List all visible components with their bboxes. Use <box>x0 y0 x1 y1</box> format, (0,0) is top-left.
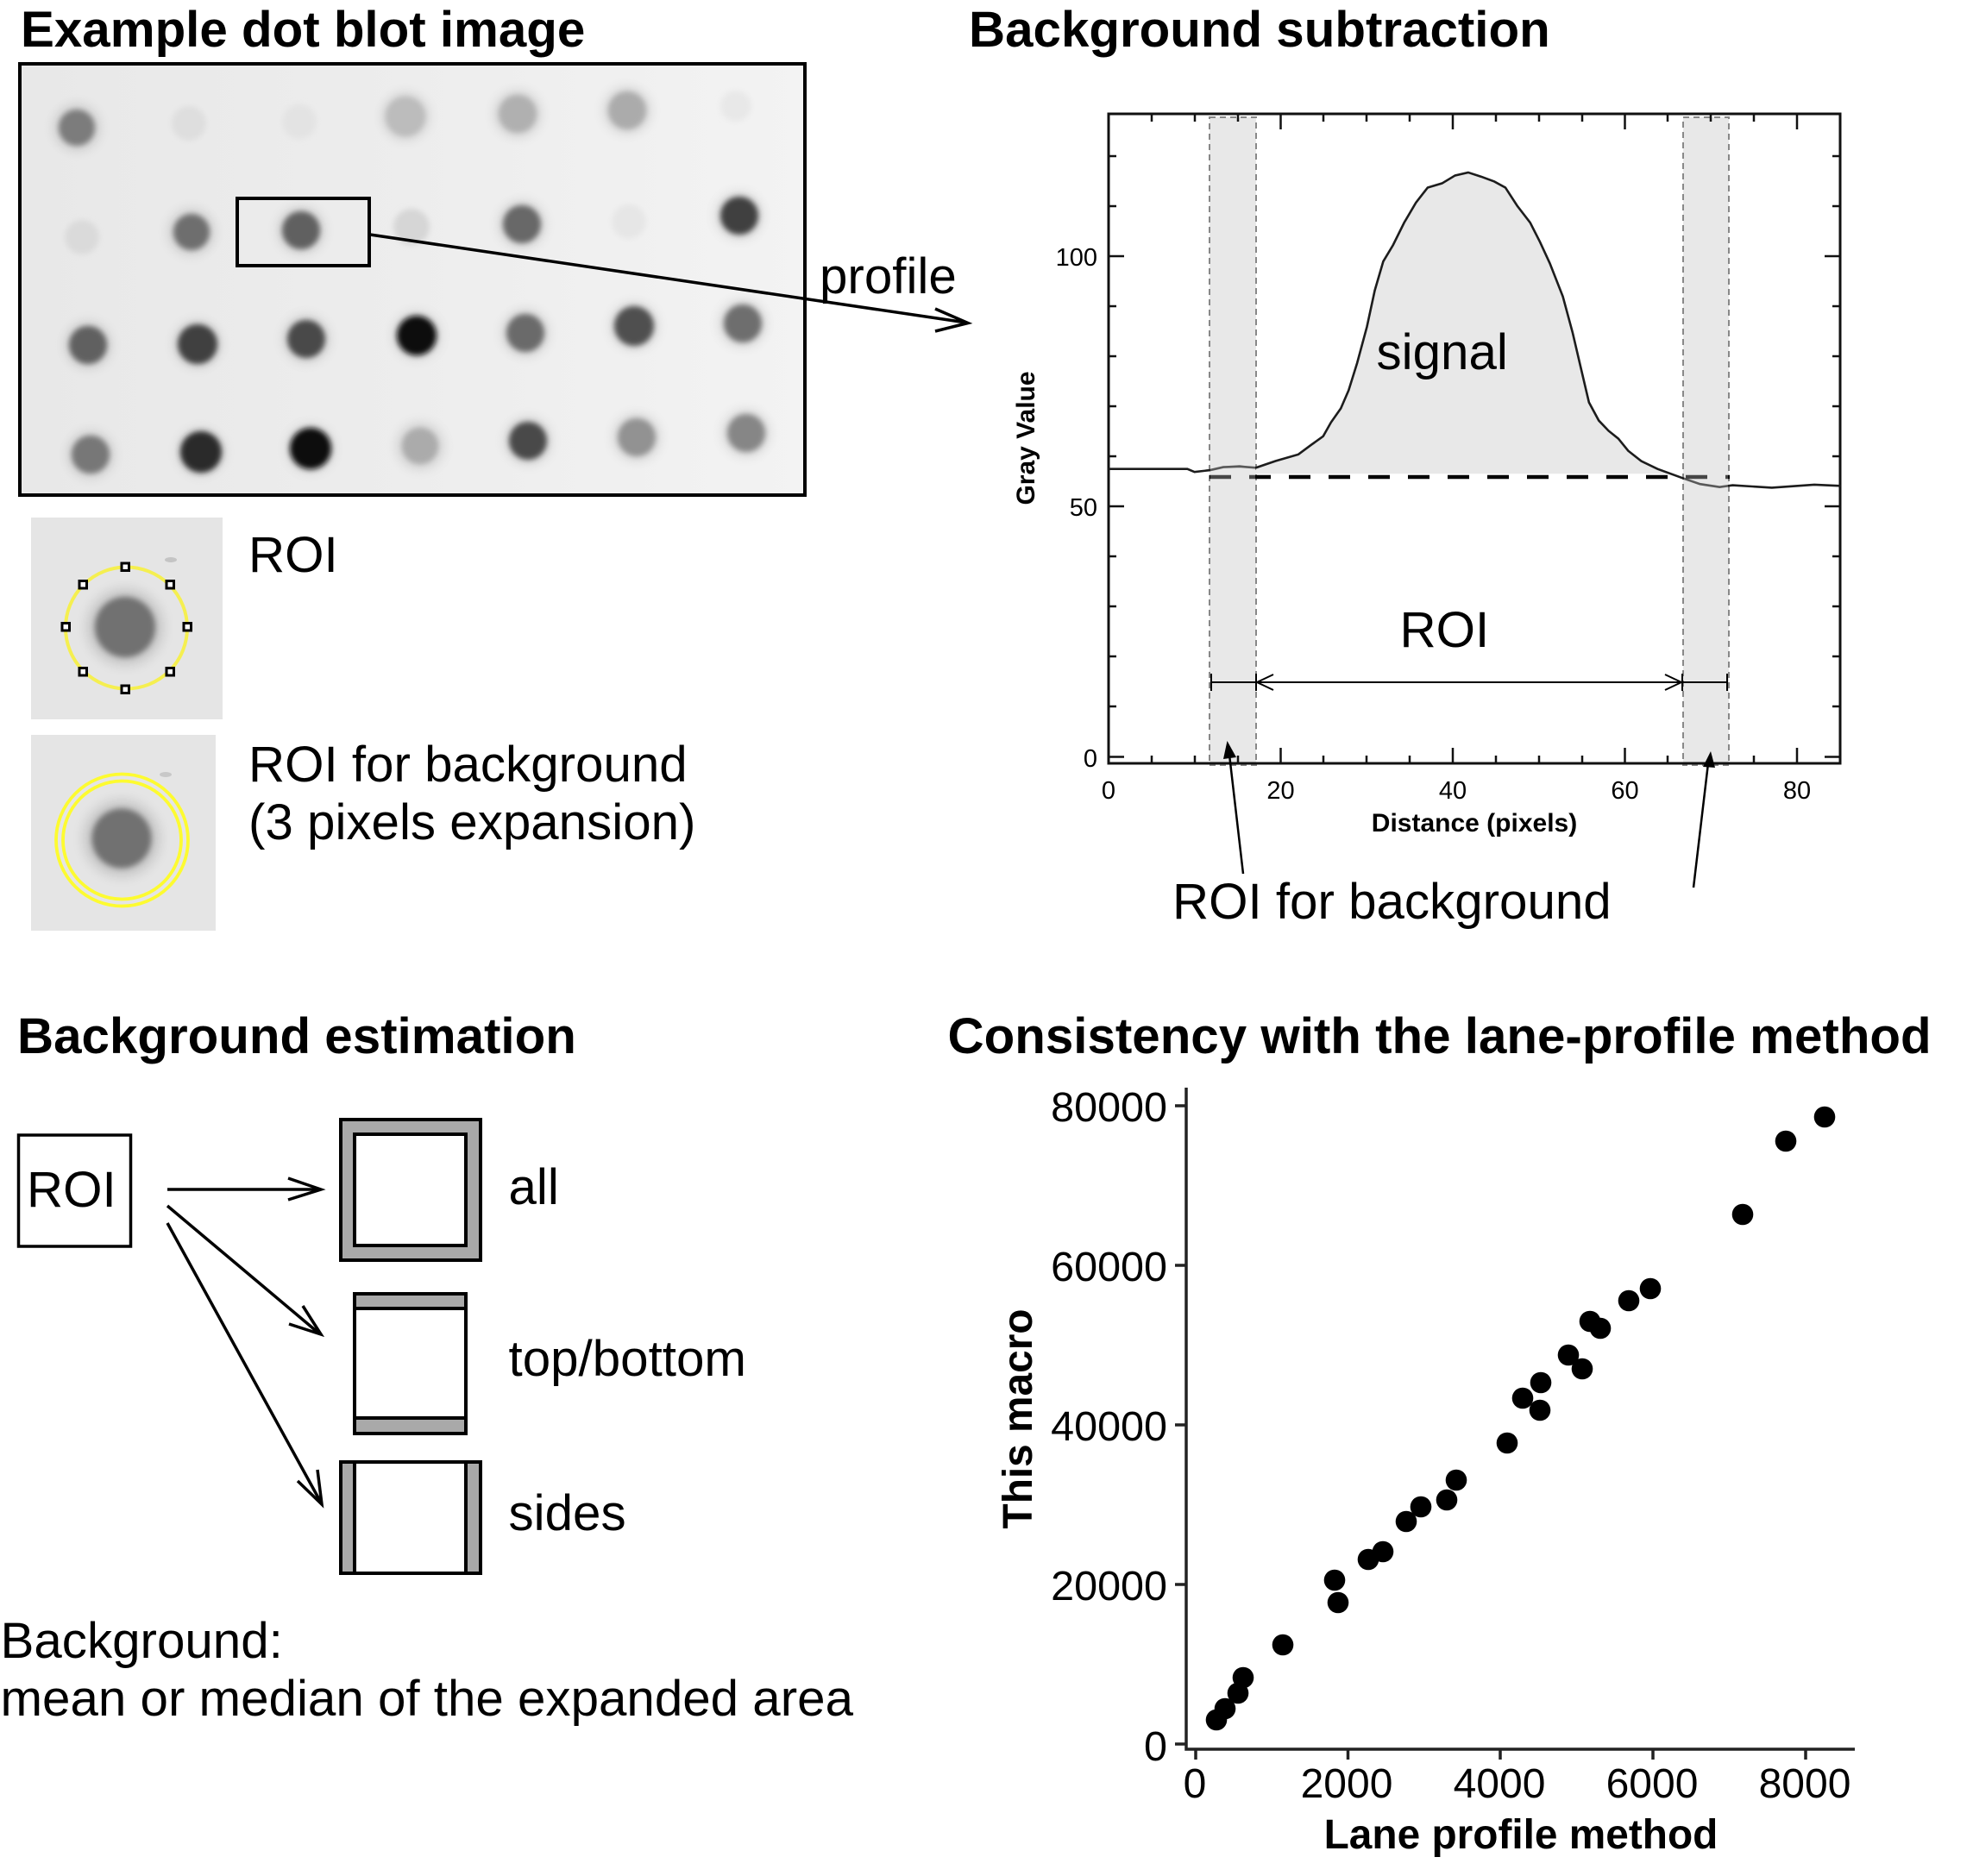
dashed background level <box>1210 475 1730 479</box>
arrow: to sides <box>167 1223 322 1504</box>
selection box around dot <box>237 198 369 266</box>
profile y axis labels <box>1056 244 1097 773</box>
profile y axis labels: 50 <box>1070 494 1097 522</box>
axis title: lane profile method: Lane profile method <box>1324 1812 1718 1858</box>
profile y axis labels: 100 <box>1056 244 1097 272</box>
label: all: all <box>509 1159 559 1215</box>
arrow: to all <box>167 1178 321 1200</box>
scatter x axis labels: 8000 <box>1759 1761 1850 1807</box>
label: sides: sides <box>509 1485 626 1541</box>
scatter axes and ticks <box>1175 1088 1855 1760</box>
label: ROI for background: ROI for background <box>1172 874 1612 930</box>
scatter y axis labels: 60000 <box>1051 1244 1167 1290</box>
label: 3 pixels expansion: (3 pixels expansion) <box>248 794 695 850</box>
label: profile: profile <box>820 248 957 304</box>
text: background definition: mean or median of the expanded area <box>0 1671 854 1727</box>
profile x axis labels: 20 <box>1266 777 1295 805</box>
scatter y axis labels: 80000 <box>1051 1084 1167 1131</box>
label: ROI in plot: ROI <box>1399 602 1489 658</box>
title: example dot blot image: Example dot blot image <box>21 2 585 58</box>
arrow: to top/bottom <box>167 1206 321 1334</box>
diagram: sides <box>341 1462 481 1573</box>
thumbnail: ROI for background <box>31 735 216 931</box>
text: background definition <box>0 1613 854 1727</box>
panel: example dot blot image <box>20 2 968 495</box>
scatter x axis labels: 6000 <box>1606 1761 1698 1807</box>
profile chart frame and ticks <box>1109 114 1840 763</box>
diagram: all <box>341 1120 481 1260</box>
profile y axis labels: 0 <box>1084 745 1097 773</box>
ROI box: ROI <box>27 1162 116 1218</box>
thumbnail: ROI <box>31 518 223 719</box>
background ROI band: left <box>1210 117 1256 765</box>
scatter x axis labels <box>1184 1761 1850 1807</box>
scatter y axis labels <box>1051 1084 1167 1770</box>
signal area fill <box>1256 173 1670 474</box>
scatter x axis labels: 4000 <box>1454 1761 1545 1807</box>
band overlays over curve <box>1210 466 1728 492</box>
ROI extent arrows <box>1211 674 1727 691</box>
profile curve <box>1109 173 1840 487</box>
dot blot image <box>20 64 805 495</box>
scatter points <box>1206 1107 1835 1730</box>
profile x axis labels: 60 <box>1611 777 1639 805</box>
axis title: distance: Distance (pixels) <box>1372 809 1577 838</box>
axis title: gray value: Gray Value <box>1012 371 1040 505</box>
panel: ROI thumbnails <box>31 518 695 931</box>
axis title: this macro: This macro <box>996 1309 1041 1528</box>
diagram: top/bottom <box>355 1294 466 1434</box>
arrow: right background ROI <box>1693 751 1715 888</box>
title: background subtraction: Background subtraction <box>969 2 1550 58</box>
profile x axis labels <box>1102 777 1811 805</box>
profile x axis labels: 80 <box>1783 777 1811 805</box>
profile x axis labels: 40 <box>1439 777 1467 805</box>
arrow: left background ROI <box>1223 741 1243 874</box>
scatter y axis labels: 40000 <box>1051 1403 1167 1450</box>
panel: background subtraction <box>969 2 1840 930</box>
label: ROI: ROI <box>248 527 338 583</box>
scatter x axis labels: 0 <box>1184 1761 1206 1807</box>
scatter x axis labels: 2000 <box>1301 1761 1392 1807</box>
title: background estimation: Background estimation <box>17 1008 576 1064</box>
label: ROI for background: ROI for background <box>248 737 688 793</box>
background ROI band: right <box>1683 117 1729 765</box>
profile x axis labels: 0 <box>1102 777 1115 805</box>
text: background definition: Background: <box>0 1613 283 1669</box>
label: top/bottom: top/bottom <box>509 1331 746 1387</box>
scatter y axis labels: 20000 <box>1051 1563 1167 1609</box>
label: signal: signal <box>1377 324 1508 380</box>
panel: consistency with the lane-profile method <box>947 1008 1932 1858</box>
arrow: profile <box>370 235 968 331</box>
title: consistency: Consistency with the lane-profile method <box>947 1008 1932 1064</box>
scatter y axis labels: 0 <box>1144 1723 1167 1770</box>
panel: background estimation <box>0 1008 854 1727</box>
ROI box <box>19 1135 131 1246</box>
